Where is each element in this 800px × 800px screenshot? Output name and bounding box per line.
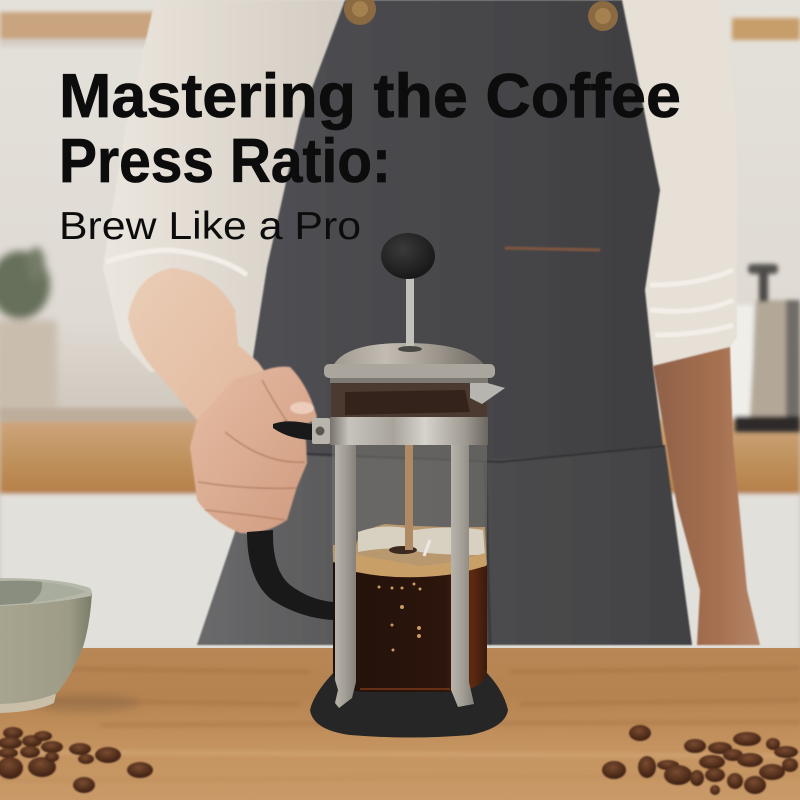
- french press: plunger shaft in glass: [405, 445, 413, 550]
- wooden table: [0, 648, 800, 800]
- coffee beans: right pile: [602, 725, 798, 795]
- french press: plunger knob: [381, 233, 435, 279]
- background: kettle: [727, 264, 800, 432]
- person: left forearm and hand: [128, 268, 317, 533]
- french press: right metal strip: [451, 445, 474, 707]
- french press: base: [310, 668, 508, 738]
- person: apron bib and skirt: [197, 0, 692, 645]
- french press: left metal strip: [335, 445, 356, 708]
- french press: spout: [470, 378, 505, 404]
- title: [59, 62, 681, 248]
- french press: bubbles: [378, 582, 422, 652]
- french press: glass carafe: [332, 445, 487, 555]
- person: shirt cuff folds: [106, 250, 733, 335]
- background: wooden counter: [0, 408, 800, 650]
- french press: [247, 233, 508, 738]
- background: potted plant: [0, 247, 57, 418]
- coffee beans: left pile: [0, 727, 153, 793]
- person: shirt and sleeves: [103, 0, 737, 372]
- ceramic bowl: [0, 578, 140, 713]
- french press: lower handle: [247, 530, 333, 620]
- french press: upper glass with grounds: [331, 380, 487, 417]
- french press: metal band: [330, 417, 488, 445]
- title line 1: Mastering the Coffee: [59, 62, 681, 131]
- background: upper shelves: [0, 12, 800, 47]
- french press: crema foam: [333, 524, 487, 577]
- french press: coffee liquid: [333, 562, 487, 692]
- french press: lid: [324, 343, 495, 383]
- french press: plunger rod: [406, 278, 414, 348]
- title line 2: Press Ratio:: [59, 127, 391, 196]
- apron buttons: [344, 0, 618, 31]
- subtitle: Brew Like a Pro: [59, 205, 361, 248]
- french press: bracket and upper handle: [273, 418, 330, 444]
- person: right forearm: [653, 347, 760, 645]
